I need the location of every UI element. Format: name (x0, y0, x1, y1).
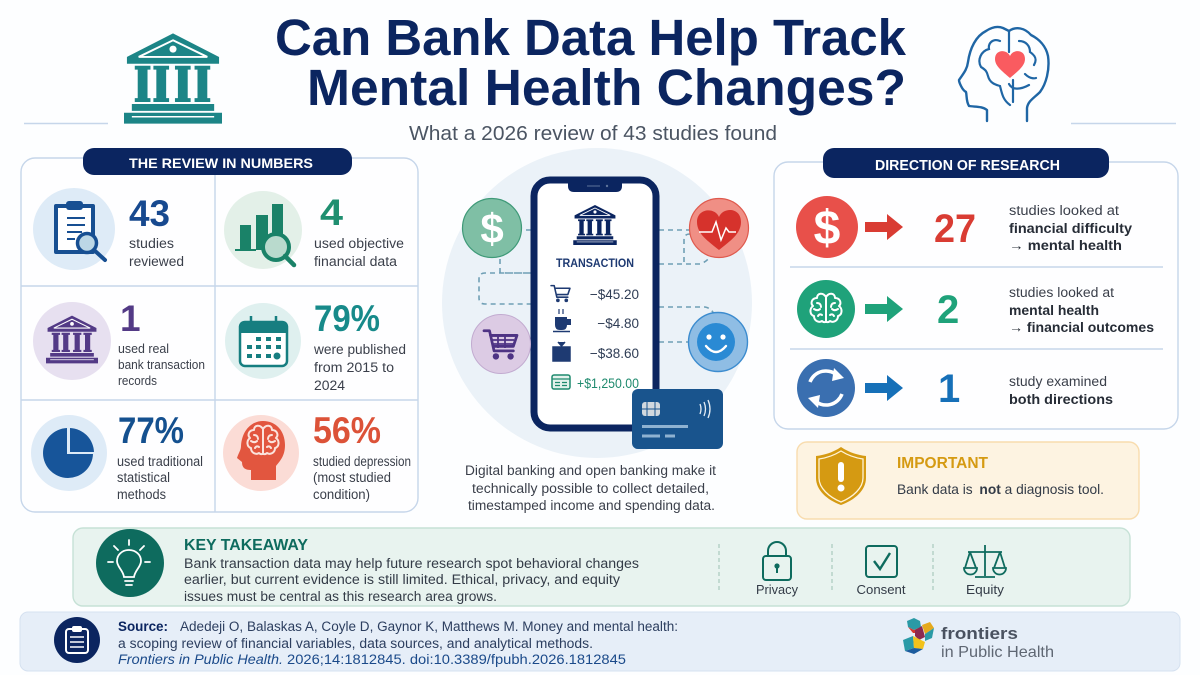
panel: source (20, 612, 1180, 671)
stat: 43 studies reviewed: reviewed (129, 254, 184, 269)
icon: equity scale: Equity (966, 583, 1005, 597)
stat: 1 used real bank transaction records: used real (118, 341, 169, 356)
stat: 77% used traditional statistical methods: 77% (118, 410, 184, 451)
key takeaway text: issues must be central as this research area grows. (184, 589, 497, 604)
row: both directions: both directions (1009, 392, 1113, 407)
row: both directions: 1 (938, 367, 960, 411)
icon: bank card (632, 389, 723, 449)
heading: direction of research (823, 148, 1109, 178)
title (275, 9, 907, 116)
key takeaway text (184, 556, 639, 604)
row: financial difficulty to mental health (796, 196, 1133, 258)
row: mental health to financial outcomes: studies looked at (1009, 285, 1114, 300)
important message: Bank data is not a diagnosis tool. (897, 481, 1104, 497)
stat: 56% studied depression: studied depression (313, 454, 411, 469)
illustration: phone with transactions (442, 148, 752, 458)
icon: smiley (688, 312, 748, 372)
icon: consent checkbox: Consent (856, 583, 906, 597)
stat: 77% used traditional statistical methods: statistical (117, 470, 170, 485)
stat: 56% studied depression (223, 410, 411, 502)
phone heading: transaction: TRANSACTION (556, 258, 634, 270)
row: mental health to financial outcomes: 2 (937, 288, 959, 332)
icon: privacy lock (756, 542, 799, 597)
source citation: a scoping review of financial variables, data sources, and analytical methods. (118, 636, 593, 651)
stat: 79% were published from 2015 to 2024: were published (313, 342, 406, 357)
stat: 4 used objective financial data: used objective (314, 236, 404, 251)
transaction rows (551, 286, 639, 391)
source citation (118, 619, 678, 667)
icon: light bulb (96, 529, 164, 597)
logo: frontiers in public health: in Public Health (941, 644, 1054, 661)
row: mental health to financial outcomes (797, 280, 1154, 338)
icon: bank building (124, 33, 222, 124)
stat: 56% studied depression: (most studied (313, 470, 391, 485)
source citation: Adedeji O, Balaskas A, Coyle D, Gaynor K, Matthews M. Money and mental health: (180, 619, 678, 634)
panel: key takeaway (73, 528, 1130, 606)
caption: digital banking: timestamped income and spending data. (468, 498, 715, 513)
icon: heart with pulse (690, 198, 748, 258)
heading: the review in numbers (83, 148, 352, 175)
stat: 56% studied depression: 56% (313, 410, 381, 451)
stat: 4 used objective financial data: 4 (320, 192, 343, 233)
subtitle: What a 2026 review of 43 studies found (409, 123, 777, 145)
row: financial difficulty to mental health: $ (814, 202, 841, 255)
stat: 1 used real bank transaction records: bank transaction (118, 357, 205, 372)
icon: dollar (462, 198, 522, 258)
stat: 79% were published from 2015 to 2024: from 2015 to (314, 360, 394, 375)
connector lines (479, 230, 714, 347)
stat: 43 studies reviewed (33, 188, 184, 270)
key takeaway text: Bank transaction data may help future research spot behavioral changes (184, 556, 639, 571)
icon: dollar: $ (480, 205, 504, 252)
icon: warning shield (816, 447, 866, 505)
stat: 4 used objective financial data (224, 191, 404, 269)
stat: 77% used traditional statistical methods (31, 410, 203, 502)
callout: important (797, 442, 1139, 519)
stat: 79% were published from 2015 to 2024: 79% (314, 298, 380, 339)
row: mental health to financial outcomes: mental health (1009, 303, 1099, 318)
heading: the review in numbers: THE REVIEW IN NUMBERS (129, 155, 313, 171)
key takeaway text: earlier, but current evidence is still limited. Ethical, privacy, and equity (184, 572, 620, 587)
icon: shopping cart (472, 314, 530, 374)
icon: privacy lock: Privacy (756, 583, 799, 597)
row: financial difficulty to mental health: 27 (934, 207, 976, 251)
key takeaway heading: KEY TAKEAWAY (184, 537, 309, 554)
heading: direction of research: DIRECTION OF RESEARCH (875, 158, 1060, 174)
title: Can Bank Data Help Track (275, 9, 907, 66)
row: financial difficulty to mental health: studies looked at (1009, 203, 1119, 218)
stat: 79% were published from 2015 to 2024: 2024 (314, 378, 345, 393)
phone (534, 180, 656, 428)
stat: 43 studies reviewed: 43 (129, 193, 170, 234)
row: financial difficulty to mental health: → mental health (1009, 238, 1122, 253)
stat: 77% used traditional statistical methods: used traditional (117, 454, 203, 469)
caption: digital banking: technically possible to collect detailed, (472, 481, 709, 496)
stat: 1 used real bank transaction records: 1 (120, 298, 141, 339)
stat: 77% used traditional statistical methods: methods (117, 487, 166, 502)
panel: the review in numbers (21, 148, 418, 512)
important heading: IMPORTANT (897, 455, 988, 472)
transaction rows: −$45.20 (590, 287, 639, 302)
row: both directions (797, 359, 1113, 417)
logo: frontiers in public health: frontiers (941, 624, 1018, 643)
stat: 4 used objective financial data: financial data (314, 254, 398, 269)
stat: 56% studied depression: condition) (313, 487, 370, 502)
stat: 43 studies reviewed: studies (129, 236, 174, 251)
transaction rows: +$1,250.00 (577, 376, 639, 391)
row: both directions: study examined (1009, 374, 1107, 389)
source citation: 2026;14:1812845. doi:10.3389/fpubh.2026.1812845 (287, 652, 626, 667)
stat: 1 used real bank transaction records: records (118, 373, 157, 388)
icon: bank on phone (573, 205, 617, 245)
logo: frontiers in public health (903, 618, 1054, 661)
row: mental health to financial outcomes: → financial outcomes (1009, 320, 1154, 335)
icon: head with heart (959, 27, 1049, 121)
transaction rows: −$38.60 (590, 346, 639, 361)
caption: digital banking (465, 463, 716, 513)
stat: 1 used real bank transaction records (33, 298, 205, 388)
source citation: Source: (118, 619, 168, 634)
stat: 79% were published from 2015 to 2024 (225, 298, 406, 393)
caption: digital banking: Digital banking and open banking make it (465, 463, 716, 478)
source citation: Frontiers in Public Health. (118, 652, 283, 667)
icon: equity scale (964, 545, 1006, 597)
transaction rows: −$4.80 (597, 316, 639, 331)
panel: direction of research (774, 148, 1178, 429)
icon: clipboard (54, 617, 100, 663)
title: Mental Health Changes? (307, 59, 906, 116)
row: financial difficulty to mental health: financial difficulty (1009, 221, 1133, 236)
icon: consent checkbox (856, 546, 906, 597)
